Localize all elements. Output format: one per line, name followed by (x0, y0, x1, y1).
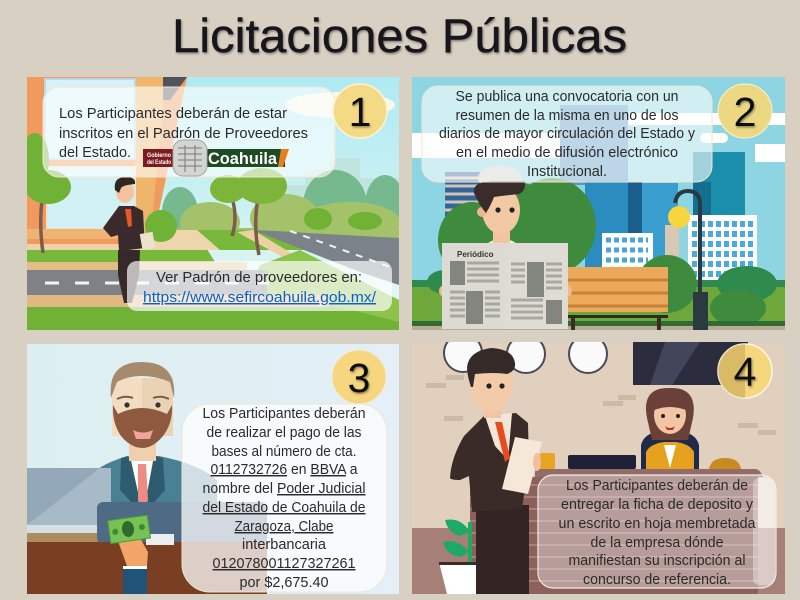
laptop (27, 468, 111, 533)
text box: datos de pago: del Estado de Coahuila de (202, 500, 366, 516)
text box: entrega de ficha: entregar la ficha de deposito y (561, 497, 754, 513)
businessman (103, 177, 155, 303)
teller (98, 362, 217, 542)
title: Licitaciones Públicas (172, 9, 627, 62)
man holding paper (450, 348, 542, 594)
text box: datos de pago: de realizar el pago de las (206, 425, 362, 441)
number badge 1: 1 (349, 89, 371, 135)
newspaper (442, 243, 568, 329)
logo: Gobierno del Estado de Coahuila (143, 140, 289, 176)
text box: datos de pago: 012078001127327261 (212, 556, 356, 572)
illustration: bank teller with banknote (27, 344, 399, 594)
number badge 4: 4 (734, 349, 756, 395)
hand with banknote (108, 515, 150, 594)
panel 4: entrega de ficha (412, 334, 785, 594)
text box: entrega de ficha: de la empresa dónde (590, 535, 724, 551)
number badge 2 (718, 84, 772, 138)
park bench (568, 267, 668, 330)
panel 3: pago de bases (27, 344, 399, 594)
text box: entrega de ficha: Los Participantes deberán de (566, 478, 748, 494)
receptionist (641, 388, 699, 470)
text box: participantes inscritos: inscritos en el Padrón de Proveedores (59, 126, 308, 142)
newspaper: Periódico (457, 250, 494, 259)
potted plant (439, 520, 476, 594)
text box: convocatoria (422, 86, 712, 182)
reception desk (470, 469, 763, 594)
illustration: office reception (412, 334, 785, 594)
text box: datos de pago: Zaragoza, Clabe (234, 519, 334, 535)
text box: participantes inscritos (43, 87, 335, 177)
logo: Gobierno del Estado de Coahuila: del Estado (147, 160, 171, 166)
text box: convocatoria: en el medio de difusión electrónico (456, 145, 678, 161)
illustration: street scene with businessman (21, 77, 405, 330)
text box: convocatoria: diarios de mayor circulación del Estado y (439, 126, 696, 142)
wall television (633, 342, 748, 385)
panel 1: registro en el padrón (21, 77, 405, 330)
illustration: man reading newspaper in park (412, 77, 785, 330)
number badge 4 (718, 344, 772, 398)
text box: entrega de ficha: concurso de referencia. (583, 572, 731, 588)
counter (27, 502, 267, 594)
text box: convocatoria: resumen de la misma en uno de los (456, 108, 678, 124)
man with newspaper (439, 166, 572, 297)
number badge 3 (332, 350, 386, 404)
text box: entrega de ficha: manifiestan su inscripción al (568, 553, 746, 569)
text box: datos de pago: por $2,675.40 (240, 575, 328, 591)
wall clocks (443, 342, 608, 374)
desk items (540, 453, 741, 469)
text box: convocatoria: Institucional. (527, 164, 607, 180)
text box: entrega de ficha (538, 475, 776, 588)
logo: Gobierno del Estado de Coahuila: Gobierno (147, 153, 171, 159)
text box: convocatoria: Se publica una convocatoria con un (456, 89, 678, 105)
text box: datos de pago: Los Participantes deberán (202, 406, 366, 422)
number badge 2: 2 (734, 89, 756, 135)
logo: Gobierno del Estado de Coahuila: Coahuila (208, 149, 278, 168)
link box: padrón de proveedores (127, 261, 392, 311)
number badge 1 (333, 84, 387, 138)
text box: datos de pago: interbancaria (242, 537, 327, 553)
link box: padrón de proveedores: https://www.sefircoahuila.gob.mx/ (143, 290, 377, 306)
text box: participantes inscritos: del Estado. (59, 145, 131, 161)
street lamp (668, 191, 708, 330)
text box: datos de pago: 0112732726 en BBVA a (210, 462, 358, 478)
text box: datos de pago: nombre del Poder Judicial (202, 481, 366, 497)
text box: participantes inscritos: Los Participantes deberán de estar (59, 106, 287, 122)
text box: datos de pago: bases al número de cta. (212, 444, 356, 460)
link box: padrón de proveedores: Ver Padrón de proveedores en: (156, 270, 362, 286)
number badge 3: 3 (348, 355, 370, 401)
text box: entrega de ficha: un escrito en hoja membretada (558, 516, 756, 532)
text box: datos de pago (182, 404, 387, 592)
panel 2: publicación de convocatoria (412, 77, 785, 330)
